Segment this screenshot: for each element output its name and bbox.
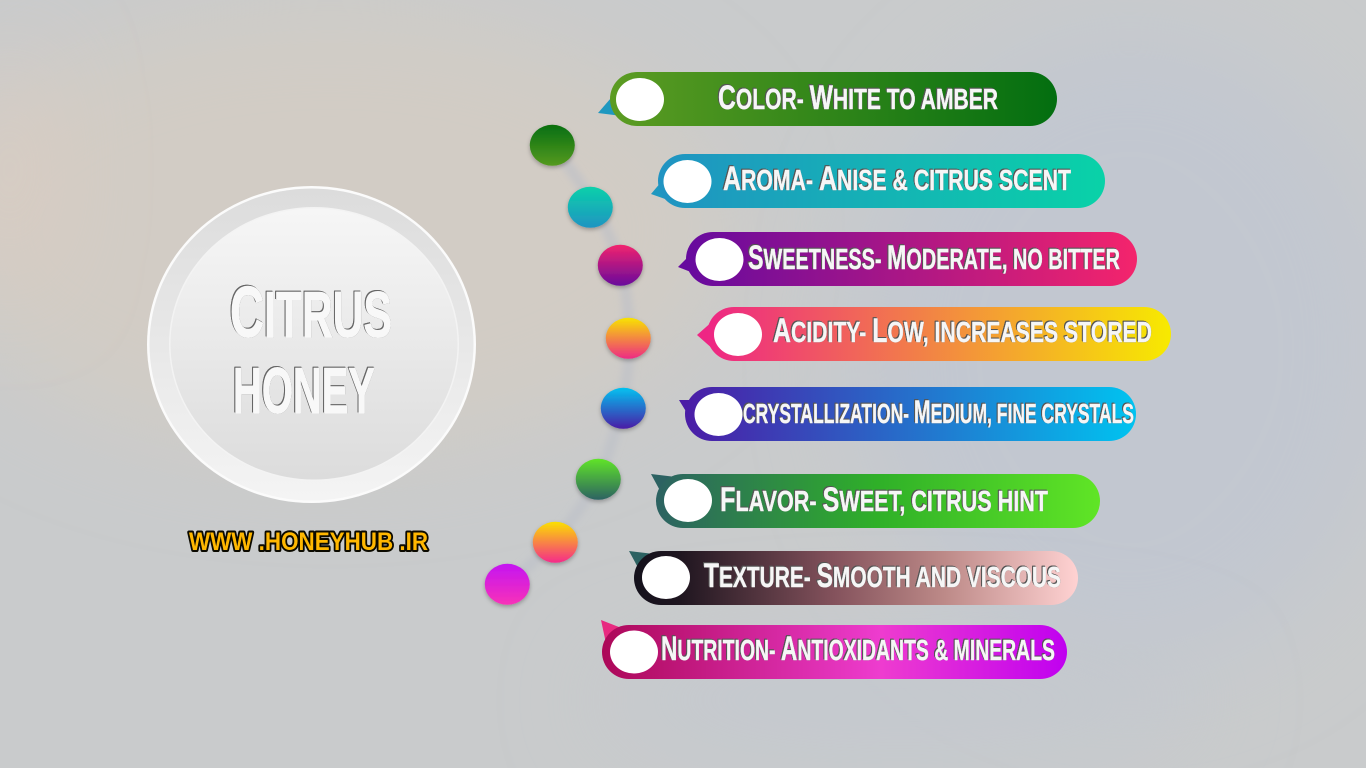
callout: acidity (697, 307, 1171, 361)
callout: nutrition: NUTRITION- ANTIOXIDANTS & MINERALS (661, 630, 1055, 668)
title: citrus honey: CITRUS (230, 273, 392, 353)
callout: texture (629, 551, 1078, 605)
callout: flavor (651, 474, 1100, 528)
callout: color: COLOR- WHITE TO AMBER (718, 79, 998, 117)
callout: color (598, 72, 1057, 126)
callout: sweetness: SWEETNESS- MODERATE, NO BITTER (748, 239, 1120, 277)
callout: crystallization (679, 387, 1136, 441)
callout: flavor: FLAVOR- SWEET, CITRUS HINT (720, 481, 1048, 519)
callout: nutrition (601, 620, 1067, 679)
callout: aroma: AROMA- ANISE & CITRUS SCENT (723, 160, 1071, 198)
callout: acidity: ACIDITY- LOW, INCREASES STORED (773, 312, 1152, 350)
website url: WWW .HONEYHUB .IR (189, 528, 428, 556)
callout: crystallization: CRYSTALLIZATION- MEDIUM, FINE CRYSTALS (743, 394, 1134, 430)
central circle badge (147, 186, 476, 503)
callout: texture: TEXTURE- SMOOTH AND VISCOUS (704, 557, 1061, 595)
callout: sweetness (678, 232, 1137, 286)
title: citrus honey: HONEY (233, 354, 375, 427)
timeline dots (485, 125, 651, 605)
title: citrus honey (230, 273, 392, 427)
connecting curve (507, 145, 629, 584)
callout: aroma (651, 154, 1105, 208)
